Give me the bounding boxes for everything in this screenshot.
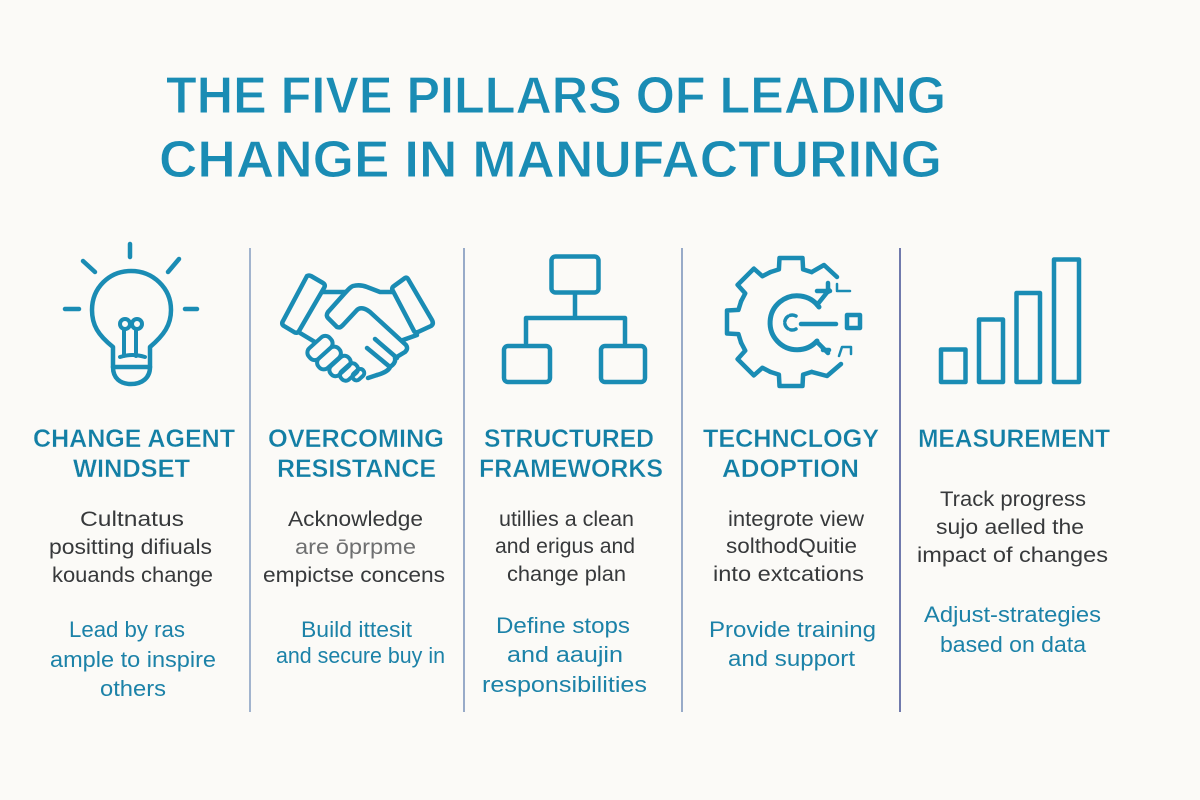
action: Define stops (496, 613, 630, 638)
title (159, 67, 946, 189)
icon: light bulb (65, 244, 197, 384)
action: and support (728, 646, 856, 671)
description: Cultnatus (80, 507, 184, 531)
action (276, 617, 445, 668)
description: solthodQuitie (726, 534, 857, 558)
description (713, 507, 864, 586)
description: Track progress (940, 487, 1086, 511)
heading: TECHNCLOGY (703, 425, 879, 453)
description (49, 507, 213, 587)
heading: WINDSET (73, 455, 190, 483)
description (917, 487, 1108, 567)
description (495, 507, 635, 586)
heading: RESISTANCE (277, 455, 436, 483)
heading: OVERCOMING (268, 425, 444, 453)
panel: structured frameworks (479, 256, 663, 697)
action: responsibilities (482, 672, 647, 697)
description: impact of changes (917, 543, 1108, 567)
icon: rising bar chart (941, 260, 1079, 382)
heading: STRUCTURED (484, 425, 654, 453)
panel: measurement (917, 260, 1110, 657)
action: ample to inspire (50, 647, 216, 672)
icon: handshake (282, 276, 433, 383)
action: Adjust-strategies (924, 602, 1101, 627)
heading (479, 425, 663, 483)
description: integrote view (728, 507, 864, 531)
panel: change agent mindset (33, 244, 235, 701)
panel: technology adoption (703, 258, 879, 671)
heading: MEASUREMENT (918, 425, 1110, 453)
action (50, 617, 216, 701)
title: CHANGE IN MANUFACTURING (159, 131, 942, 189)
action (709, 617, 876, 671)
description: into extcations (713, 562, 864, 586)
description: and erigus and (495, 534, 635, 558)
heading: CHANGE AGENT (33, 425, 235, 453)
heading (268, 425, 444, 483)
action: and aaujin (507, 642, 623, 667)
action (482, 613, 647, 697)
panel: overcoming resistance (263, 276, 445, 668)
heading: ADOPTION (722, 455, 859, 483)
title: THE FIVE PILLARS OF LEADING (166, 67, 946, 125)
heading: FRAMEWORKS (479, 455, 663, 483)
description: positting difiuals (49, 535, 212, 559)
action: Lead by ras (69, 617, 185, 642)
description (263, 507, 445, 587)
description: empictse concens (263, 563, 445, 587)
description: sujo aelled the (936, 515, 1084, 539)
heading (33, 425, 235, 483)
description: are ōprpme (295, 535, 416, 559)
action (924, 602, 1101, 657)
action: based on data (940, 632, 1086, 657)
heading (703, 425, 879, 483)
icon: gear with digital circuit (727, 258, 860, 386)
action: others (100, 676, 166, 701)
description: Acknowledge (288, 507, 423, 531)
action: Provide training (709, 617, 876, 642)
description: kouands change (52, 563, 213, 587)
icon: hierarchy chart (504, 256, 645, 382)
action: Build ittesit (301, 617, 413, 642)
description: change plan (507, 562, 626, 586)
action: and secure buy in (276, 643, 445, 668)
description: utillies a clean (499, 507, 634, 531)
